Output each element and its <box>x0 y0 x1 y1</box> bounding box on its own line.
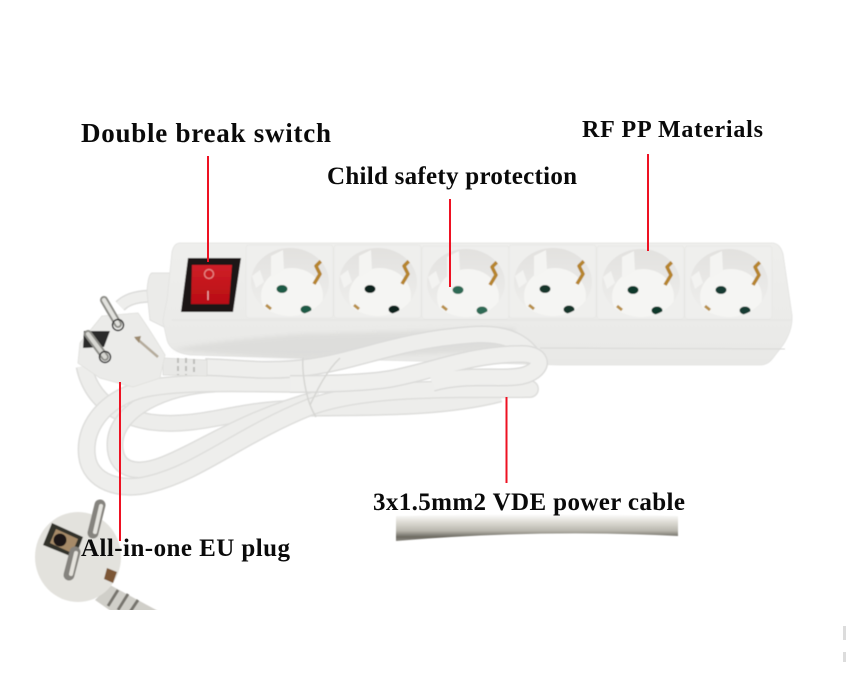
leader line: child safety <box>449 199 451 287</box>
socket 2 <box>334 245 421 324</box>
leader line: EU plug <box>119 382 121 541</box>
socket 6 <box>685 246 772 325</box>
leader line: switch <box>207 156 209 262</box>
rocker switch <box>181 258 241 312</box>
coiled power cable <box>84 334 539 487</box>
close-up photo: cable marking <box>396 514 678 541</box>
label: Double break switch: Double break switch <box>81 118 331 148</box>
leader line: materials <box>647 154 649 251</box>
socket 3 <box>422 246 509 325</box>
label: All-in-one EU plug: All-in-one EU plug <box>81 535 290 562</box>
socket 4 <box>509 245 596 324</box>
faint edge marks <box>843 626 846 662</box>
label: Child safety protection: Child safety protection <box>327 163 577 190</box>
socket 5 <box>597 246 684 325</box>
EU plug on cable <box>78 300 165 387</box>
socket 1 <box>246 245 333 324</box>
leader line: power cable <box>506 397 508 483</box>
label: power cable: 3x1.5mm2 VDE power cable <box>373 489 685 516</box>
cord stub to plug <box>120 273 172 330</box>
close-up photo: EU plug <box>35 505 160 616</box>
power strip body <box>163 243 792 365</box>
strain relief <box>163 358 207 376</box>
label: RF PP Materials: RF PP Materials <box>582 117 763 143</box>
product photo: power strip with cable <box>78 243 792 487</box>
